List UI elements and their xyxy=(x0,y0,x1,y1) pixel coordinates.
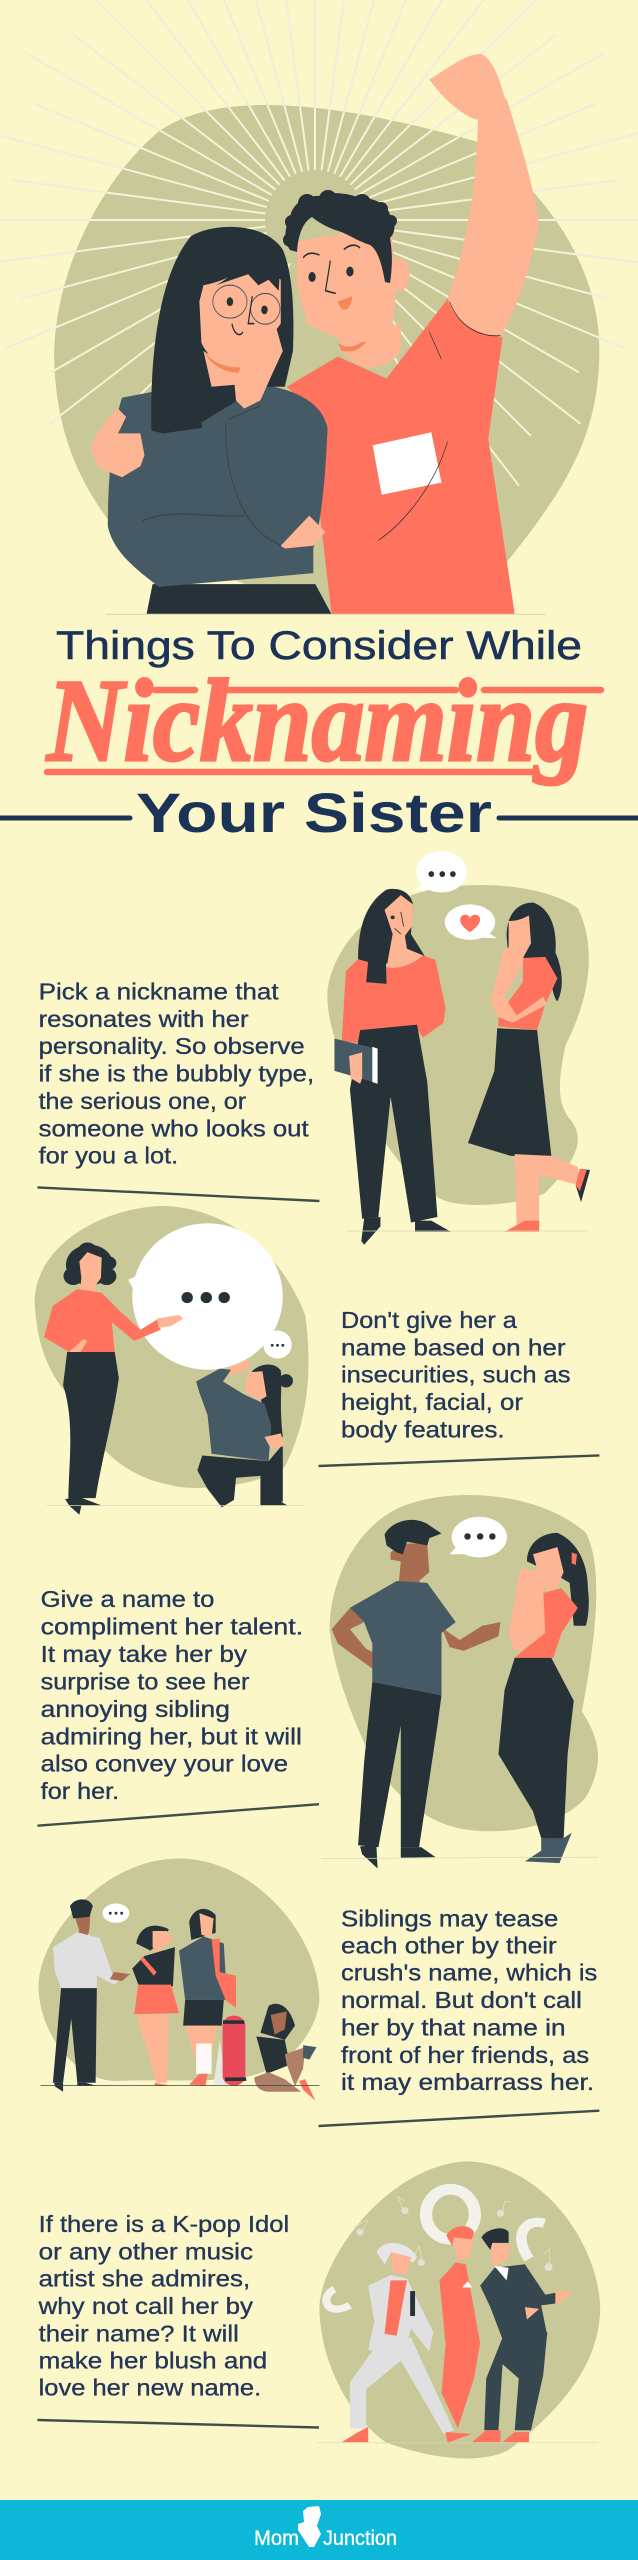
woman's hand on cheek xyxy=(234,329,283,409)
text block: tip 1: if she is the bubbly type, xyxy=(39,1061,314,1087)
title line 3: Your Sister xyxy=(136,781,492,844)
text block: tip 3: It may take her by xyxy=(41,1641,248,1667)
man's curly hair xyxy=(283,190,397,283)
title xyxy=(0,624,638,844)
ground line xyxy=(346,1230,588,1232)
text block: tip 1 xyxy=(39,978,314,1168)
text block: tip 2: height, facial, or xyxy=(341,1389,523,1415)
white rings xyxy=(326,2189,544,2309)
text block: tip 4: her by that name in xyxy=(341,2015,566,2041)
speech bubble with dots xyxy=(414,851,467,893)
text block: tip 3: for her. xyxy=(41,1778,119,1804)
woman's sweater xyxy=(108,381,328,587)
man xyxy=(332,1520,500,1869)
text block: tip 3 xyxy=(41,1586,303,1804)
neck and face xyxy=(385,895,423,968)
text block: tip 1: Pick a nickname that xyxy=(39,978,279,1004)
panel: tip 4 illustration xyxy=(39,1859,319,2101)
sunburst rays inside the blob xyxy=(54,105,599,486)
text block: tip 3: admiring her, but it will xyxy=(41,1723,302,1749)
text block: tip 3: also convey your love xyxy=(41,1751,288,1777)
small speech bubble xyxy=(263,1331,292,1359)
logo icon xyxy=(298,2506,321,2547)
text block: tip 5: why not call her by xyxy=(37,2293,254,2319)
singer in dark suit xyxy=(472,2228,573,2442)
sunburst rays outside the blob xyxy=(0,0,638,510)
text block: tip 2: name based on her xyxy=(341,1334,566,1360)
backdrop blob xyxy=(35,1206,308,1488)
singer in grey suit xyxy=(342,2243,472,2443)
panel: tip 2 illustration xyxy=(35,1206,308,1515)
speech bubble xyxy=(103,1904,129,1923)
trousers xyxy=(350,1025,437,1223)
text block: tip 4 xyxy=(341,1905,597,2095)
left woman xyxy=(334,889,451,1245)
speech bubble xyxy=(450,1517,507,1557)
footer band: Junction xyxy=(323,2527,397,2550)
two people xyxy=(92,54,545,614)
text block: tip 3: compliment her talent. xyxy=(41,1614,303,1640)
text block: tip 1: for you a lot. xyxy=(39,1142,178,1168)
title line 1: Things To Consider While xyxy=(56,624,582,668)
bottom accent bar xyxy=(47,769,535,775)
ground line xyxy=(47,1504,305,1506)
right woman xyxy=(468,903,590,1232)
backdrop blob xyxy=(39,1859,319,2081)
text block: tip 4: normal. But don't call xyxy=(341,1987,582,2013)
man's raised arm xyxy=(448,99,539,337)
woman with phone xyxy=(132,1926,179,2086)
man's hand on her shoulder xyxy=(92,409,144,477)
hero backdrop blob xyxy=(54,105,599,614)
text block: tip 2: Don't give her a xyxy=(341,1307,517,1333)
man with crossed arms xyxy=(179,1909,236,2086)
script word Nicknaming: Nicknaming xyxy=(45,655,588,786)
woman's fringe xyxy=(216,252,281,291)
book xyxy=(334,1039,376,1083)
text block: tip 5: If there is a K-pop Idol xyxy=(39,2211,289,2237)
panel: tip 3 illustration xyxy=(321,1495,598,1869)
text block: tip 5: their name? It will xyxy=(39,2320,239,2346)
title side rules xyxy=(0,816,638,820)
woman's hair xyxy=(151,227,293,433)
back hair xyxy=(358,889,425,964)
shirt crease xyxy=(378,442,448,540)
text block: tip 4: crush's name, which is xyxy=(341,1960,597,1986)
woman's glasses and eyes xyxy=(213,285,247,318)
panel: tip 1 illustration xyxy=(327,851,590,1245)
backdrop blob xyxy=(327,885,589,1205)
man in white sweater xyxy=(53,1899,130,2092)
kneeling woman xyxy=(196,1359,293,1507)
text block: tip 1: personality. So observe xyxy=(39,1033,305,1059)
panel: hero illustration xyxy=(0,0,638,614)
large speech bubble xyxy=(128,1223,283,1370)
text block: tip 4: Siblings may tease xyxy=(341,1905,558,1931)
front hair strip xyxy=(366,904,389,984)
woman xyxy=(498,1533,589,1863)
standing woman xyxy=(44,1242,183,1515)
text block: tip 3: surprise to see her xyxy=(41,1669,250,1695)
text block: tip 4: front of her friends, as xyxy=(341,2042,589,2068)
text block: tip 2: insecurities, such as xyxy=(341,1362,570,1388)
text block: tip 5: make her blush and xyxy=(39,2348,267,2374)
top accent bars xyxy=(155,687,601,693)
text block: tip 2 xyxy=(341,1307,570,1442)
backdrop blob xyxy=(330,1495,598,1831)
text block: tip 1: resonates with her xyxy=(39,1006,249,1032)
man's face details xyxy=(308,272,316,282)
seated woman xyxy=(254,2004,317,2101)
skateboard xyxy=(214,2016,246,2086)
text block: tip 1: the serious one, or xyxy=(39,1088,246,1114)
woman's pants xyxy=(146,584,332,614)
text block: tip 5 xyxy=(37,2211,289,2401)
man's fist xyxy=(429,54,509,120)
speech bubble with heart xyxy=(445,904,497,940)
panel: tip 5 illustration xyxy=(317,2161,600,2458)
text block: tip 4: each other by their xyxy=(341,1932,557,1958)
ground line xyxy=(317,2442,598,2444)
text block: tip 3: annoying sibling xyxy=(41,1696,230,1722)
footer band xyxy=(0,2500,638,2560)
man's neck and head xyxy=(340,324,401,367)
man's shirt xyxy=(287,299,515,614)
name tag xyxy=(373,432,441,495)
man's hand at her waist xyxy=(281,516,326,549)
text block: tip 2: body features. xyxy=(341,1416,505,1442)
woman's neck xyxy=(203,351,244,387)
backdrop blob xyxy=(319,2161,600,2458)
ground line xyxy=(321,1857,598,1859)
text block: tip 4: it may embarrass her. xyxy=(341,2069,594,2095)
woman's face xyxy=(199,258,281,373)
text block: tip 5: or any other music xyxy=(39,2238,253,2264)
logo text: Mom xyxy=(254,2527,299,2550)
text block: tip 5: artist she admires, xyxy=(39,2265,250,2291)
ground line xyxy=(106,613,545,615)
text block: tip 3: Give a name to xyxy=(41,1586,214,1612)
music notes xyxy=(354,2196,552,2271)
sleeve seam xyxy=(429,302,500,359)
text block: tip 1: someone who looks out xyxy=(39,1115,309,1141)
text block: tip 5: love her new name. xyxy=(39,2375,261,2401)
singer in coral suit xyxy=(439,2226,480,2429)
ground line xyxy=(41,2085,319,2087)
blouse xyxy=(342,955,446,1043)
